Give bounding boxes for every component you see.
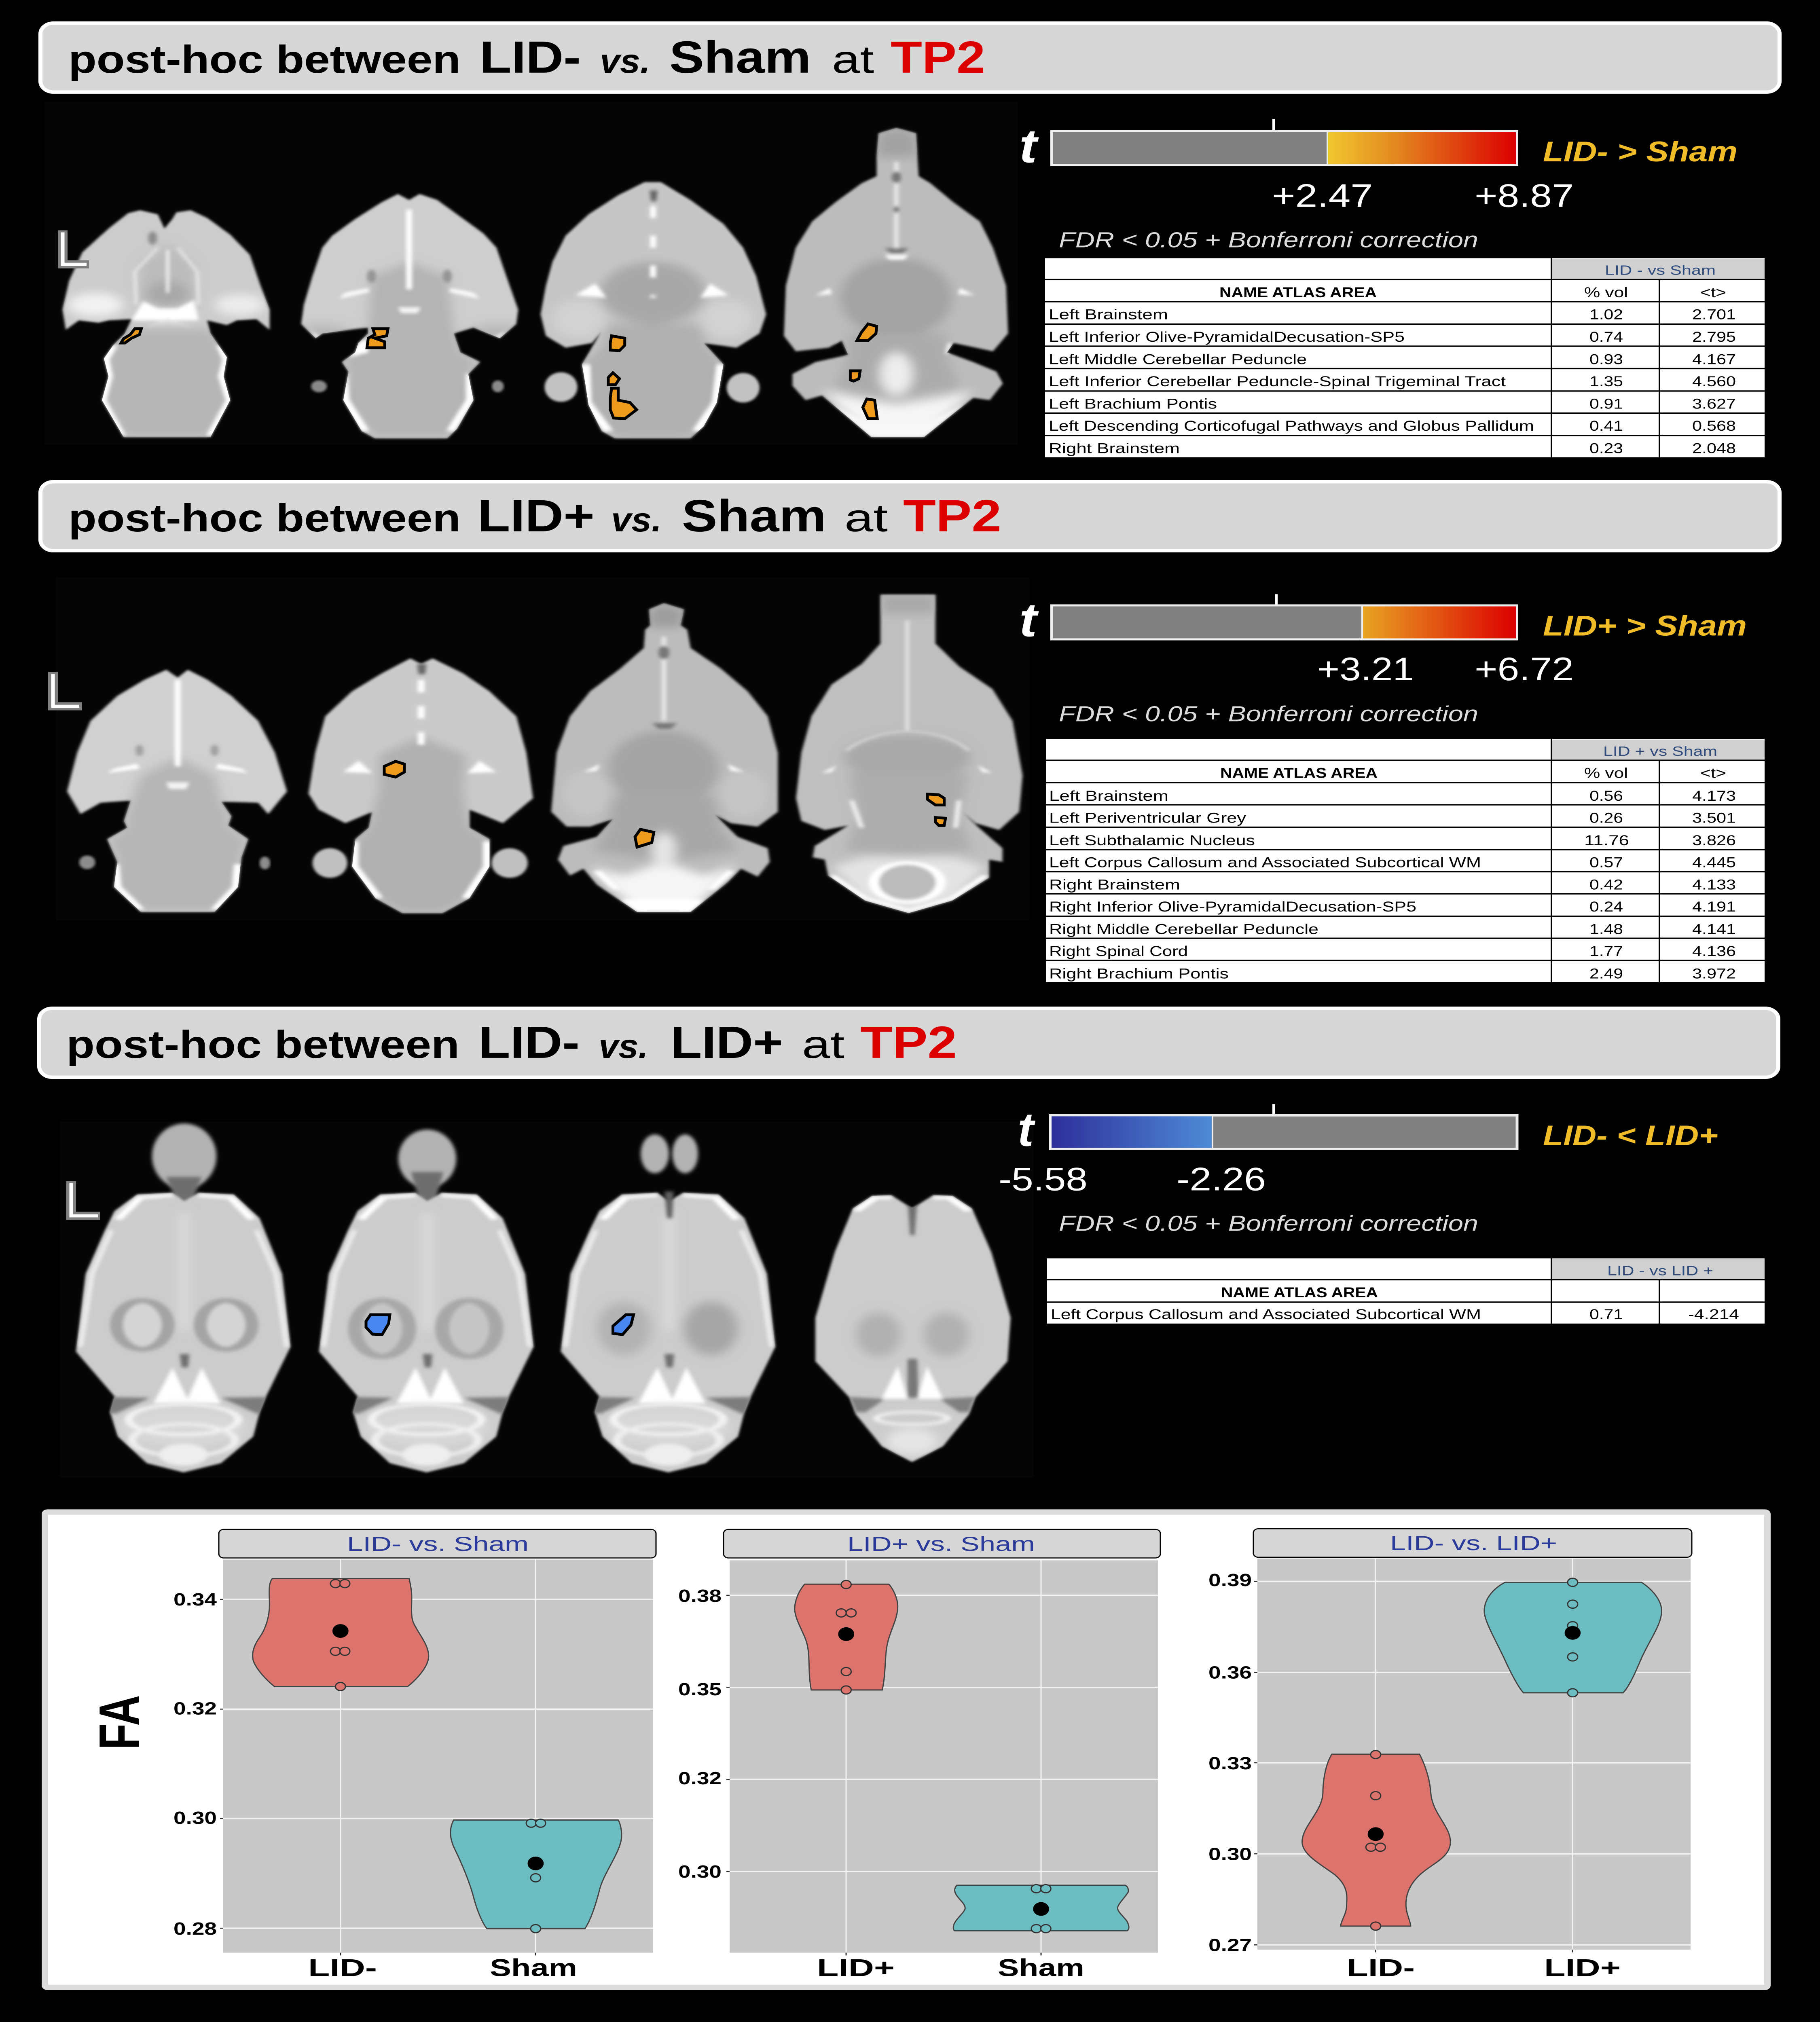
title bar: LID+ vs. Sham at TP2: TP2	[903, 491, 1001, 541]
color scale: LID- > Sham: FDR < 0.05 + Bonferroni correction	[1059, 227, 1478, 252]
plot: LID- vs. Sham: 0.30	[174, 1808, 217, 1828]
table: LID+ vs Sham: Right Brachium Pontis	[1049, 966, 1229, 982]
table: LID+ vs Sham: 4.141	[1692, 921, 1736, 937]
title bar: LID- vs. Sham at TP2	[40, 23, 1780, 92]
table: LID+ vs Sham: Right Spinal Cord	[1049, 943, 1188, 959]
plot: LID- vs. LID+: LID+	[1544, 1954, 1621, 1982]
title bar: LID- vs. LID+ at TP2: TP2	[860, 1017, 957, 1068]
table: LID+ vs Sham	[1046, 739, 1766, 982]
table: LID- vs LID+: 0.71	[1589, 1307, 1623, 1322]
table: LID- vs Sham: 4.167	[1692, 352, 1736, 368]
plot: LID- vs. Sham	[174, 1529, 656, 1982]
color scale: LID- < LID+: -5.58	[999, 1161, 1088, 1197]
table: LID- vs Sham	[1045, 258, 1766, 457]
plot: LID- vs. Sham: 0.32	[174, 1699, 217, 1719]
plot: LID- vs. LID+	[1208, 1529, 1692, 1982]
violin: LID+	[1484, 1578, 1661, 1697]
table: LID- vs Sham: 4.560	[1692, 374, 1736, 389]
brain slice 2	[301, 194, 518, 438]
title bar: LID- vs. LID+ at TP2	[39, 1008, 1778, 1077]
brain slice 1	[67, 670, 287, 912]
table: LID+ vs Sham: LID + vs Sham	[1603, 744, 1717, 759]
color scale: LID- > Sham: t	[1019, 120, 1039, 173]
table: LID- vs LID+: -4.214	[1688, 1307, 1739, 1322]
table: LID- vs Sham: 0.41	[1589, 418, 1623, 434]
table: LID- vs Sham: 0.74	[1589, 329, 1623, 345]
plot: LID+ vs. Sham: 0.30	[678, 1862, 722, 1882]
title bar: LID- vs. Sham at TP2: TP2	[891, 32, 985, 82]
table: LID- vs Sham: 1.35	[1589, 374, 1623, 389]
L orientation marker	[71, 1181, 100, 1216]
title bar: LID+ vs. Sham at TP2: vs.	[611, 500, 662, 539]
color scale: LID- > Sham: +8.87	[1475, 178, 1574, 214]
plot: LID+ vs. Sham: LID+ vs. Sham	[847, 1532, 1035, 1555]
table: LID+ vs Sham: Right Brainstem	[1049, 877, 1180, 893]
table: LID+ vs Sham: 2.49	[1589, 966, 1623, 982]
table: LID- vs Sham: Left Inferior Cerebellar Peduncle-Spinal Trigeminal Tract	[1049, 374, 1506, 389]
violin: Sham	[953, 1885, 1129, 1933]
panel: FA violin plots	[45, 1512, 1767, 1987]
brain slice 1	[62, 210, 270, 437]
table: LID+ vs Sham: 3.501	[1692, 810, 1736, 826]
brain slice 3	[551, 603, 778, 912]
plot: LID- vs. Sham: 0.34	[174, 1590, 217, 1610]
plot: LID- vs. LID+: 0.33	[1208, 1754, 1252, 1773]
activation clusters	[384, 761, 946, 847]
table: LID+ vs Sham: NAME ATLAS AREA	[1220, 766, 1378, 781]
plot: LID- vs. LID+: LID- vs. LID+	[1390, 1532, 1557, 1555]
table: LID+ vs Sham: Left Subthalamic Nucleus	[1049, 833, 1255, 848]
brain slice 4	[815, 1195, 1011, 1462]
title bar: LID- vs. LID+ at TP2: post-hoc between	[66, 1023, 459, 1066]
table: LID- vs Sham: NAME ATLAS AREA	[1219, 285, 1377, 300]
title bar: LID- vs. Sham at TP2: vs.	[600, 42, 650, 80]
table: LID+ vs Sham: 3.972	[1692, 966, 1736, 982]
table: LID- vs Sham: <t>	[1700, 285, 1726, 300]
table: LID+ vs Sham: 1.48	[1589, 921, 1623, 937]
title bar: LID- vs. LID+ at TP2: LID-	[478, 1017, 580, 1068]
plot: LID- vs. Sham: LID- vs. Sham	[347, 1532, 529, 1555]
plot: LID- vs. LID+: 0.36	[1208, 1663, 1252, 1683]
brain slice 2	[319, 1129, 533, 1472]
plot: LID- vs. LID+: 0.27	[1208, 1935, 1252, 1955]
table: LID- vs LID+	[1047, 1258, 1766, 1324]
title bar: LID+ vs. Sham at TP2: at	[844, 496, 888, 540]
table: LID+ vs Sham: 4.445	[1692, 855, 1736, 871]
plot: LID+ vs. Sham: 0.38	[678, 1586, 722, 1606]
plot: LID- vs. Sham: Sham	[490, 1954, 577, 1982]
brain slice 4	[784, 128, 1008, 437]
plot: LID+ vs. Sham: 0.35	[678, 1680, 722, 1699]
table: LID- vs Sham: LID - vs Sham	[1605, 263, 1716, 278]
color scale: LID- < LID+: LID- < LID+	[1543, 1120, 1718, 1151]
panel: axial brain slices, LID- vs Sham	[58, 126, 1011, 441]
title bar: LID- vs. LID+ at TP2: at	[802, 1023, 844, 1066]
plot: LID- vs. LID+: 0.39	[1208, 1571, 1252, 1590]
violin: Sham	[451, 1819, 622, 1933]
table: LID- vs Sham: 0.91	[1589, 396, 1623, 412]
plot: LID- vs. Sham: LID-	[308, 1954, 377, 1982]
table: LID- vs Sham: Left Inferior Olive-PyramidalDecusation-SP5	[1049, 329, 1405, 345]
title bar: LID- vs. Sham at TP2: Sham	[669, 32, 811, 82]
title bar: LID- vs. Sham at TP2: post-hoc between	[68, 37, 461, 81]
table: LID- vs Sham: Left Descending Corticofugal Pathways and Globus Pallidum	[1049, 418, 1534, 434]
table: LID+ vs Sham: 4.133	[1692, 877, 1736, 893]
table: LID+ vs Sham: 3.826	[1692, 833, 1736, 848]
table: LID+ vs Sham: <t>	[1700, 766, 1726, 781]
title bar: LID+ vs. Sham at TP2: Sham	[682, 491, 826, 541]
brain slice 4	[796, 594, 1022, 913]
panel: axial brain slices, LID+ vs Sham	[53, 577, 1029, 921]
brain slice 3	[561, 1134, 775, 1472]
table: LID+ vs Sham: Left Periventricular Grey	[1049, 810, 1246, 826]
table: LID+ vs Sham: 0.42	[1589, 877, 1623, 893]
color scale: LID+ > Sham: t	[1019, 594, 1039, 647]
table: LID- vs LID+: NAME ATLAS AREA	[1221, 1285, 1378, 1301]
plot: LID+ vs. Sham: Sham	[998, 1954, 1084, 1982]
table: LID+ vs Sham: 4.191	[1692, 899, 1736, 915]
title bar: LID+ vs. Sham at TP2	[40, 482, 1780, 551]
title bar: LID- vs. LID+ at TP2: vs.	[599, 1027, 648, 1065]
y-axis title FA: FA	[87, 1695, 151, 1750]
table: LID+ vs Sham: 11.76	[1584, 833, 1629, 848]
brain slice 1	[76, 1123, 290, 1472]
activation clusters	[366, 1315, 633, 1335]
L orientation marker	[63, 231, 89, 264]
table: LID- vs Sham: Left Brainstem	[1049, 307, 1168, 323]
violin: LID-	[253, 1579, 429, 1690]
title bar: LID+ vs. Sham at TP2: post-hoc between	[68, 496, 461, 540]
table: LID+ vs Sham: 4.136	[1692, 943, 1736, 959]
color scale: LID+ > Sham: LID+ > Sham	[1543, 610, 1747, 642]
L orientation marker	[53, 672, 82, 706]
color scale: LID- < LID+	[999, 1103, 1718, 1235]
table: LID+ vs Sham: Right Middle Cerebellar Peduncle	[1049, 921, 1318, 937]
table: LID- vs Sham: Right Brainstem	[1049, 441, 1180, 457]
plot: LID+ vs. Sham: LID+	[817, 1954, 895, 1982]
title bar: LID- vs. LID+ at TP2: LID+	[671, 1017, 783, 1068]
table: LID- vs Sham: 2.795	[1692, 329, 1736, 345]
table: LID+ vs Sham: 1.77	[1589, 943, 1623, 959]
table: LID- vs Sham: Left Brachium Pontis	[1049, 396, 1217, 412]
color scale: LID- < LID+: FDR < 0.05 + Bonferroni correction	[1059, 1211, 1478, 1235]
table: LID- vs LID+: Left Corpus Callosum and Associated Subcortical WM	[1051, 1307, 1481, 1322]
table: LID+ vs Sham: Left Corpus Callosum and Associated Subcortical WM	[1049, 855, 1481, 871]
table: LID- vs Sham: 2.048	[1692, 441, 1736, 457]
brain slice 2	[309, 658, 533, 913]
table: LID- vs Sham: % vol	[1584, 285, 1628, 300]
activation clusters	[121, 324, 877, 419]
table: LID- vs Sham: 2.701	[1692, 307, 1736, 323]
color scale: LID- > Sham: +2.47	[1272, 178, 1373, 214]
table: LID+ vs Sham: 0.56	[1589, 788, 1623, 804]
violin: LID+	[795, 1580, 898, 1694]
table: LID+ vs Sham: 0.57	[1589, 855, 1623, 871]
table: LID- vs Sham: 0.568	[1692, 418, 1736, 434]
color scale: LID- < LID+: -2.26	[1177, 1161, 1266, 1197]
plot: LID- vs. LID+: LID-	[1347, 1954, 1415, 1982]
plot: LID- vs. LID+: 0.30	[1208, 1844, 1252, 1864]
color scale: LID- < LID+: t	[1018, 1103, 1036, 1156]
table: LID+ vs Sham: 0.24	[1589, 899, 1623, 915]
color scale: LID- > Sham	[1019, 119, 1737, 252]
color scale: LID+ > Sham: +3.21	[1317, 651, 1414, 687]
violin: LID-	[1302, 1751, 1450, 1930]
color scale: LID+ > Sham: FDR < 0.05 + Bonferroni correction	[1059, 701, 1478, 726]
title bar: LID- vs. Sham at TP2: LID-	[480, 32, 581, 82]
color scale: LID+ > Sham: +6.72	[1475, 651, 1574, 687]
color scale: LID- > Sham: LID- > Sham	[1543, 136, 1737, 167]
title bar: LID- vs. Sham at TP2: at	[832, 37, 874, 81]
color scale: LID+ > Sham	[1019, 594, 1747, 726]
brain slice 3	[541, 182, 766, 438]
table: LID+ vs Sham: % vol	[1584, 766, 1628, 781]
table: LID+ vs Sham: 0.26	[1589, 810, 1623, 826]
title bar: LID+ vs. Sham at TP2: LID+	[478, 491, 595, 541]
table: LID- vs LID+: LID - vs LID +	[1607, 1263, 1713, 1278]
plot: LID- vs. Sham: 0.28	[174, 1919, 217, 1939]
table: LID- vs Sham: 0.93	[1589, 352, 1623, 368]
plot: LID+ vs. Sham: 0.32	[678, 1769, 722, 1788]
table: LID+ vs Sham: Left Brainstem	[1049, 788, 1168, 804]
table: LID- vs Sham: 1.02	[1589, 307, 1623, 323]
table: LID+ vs Sham: Right Inferior Olive-PyramidalDecusation-SP5	[1049, 899, 1416, 915]
table: LID- vs Sham: 3.627	[1692, 396, 1736, 412]
panel: axial brain slices, LID- vs LID+	[60, 1121, 1034, 1478]
plot: LID+ vs. Sham	[678, 1529, 1160, 1982]
table: LID+ vs Sham: 4.173	[1692, 788, 1736, 804]
table: LID- vs Sham: Left Middle Cerebellar Peduncle	[1049, 352, 1307, 368]
table: LID- vs Sham: 0.23	[1589, 441, 1623, 457]
